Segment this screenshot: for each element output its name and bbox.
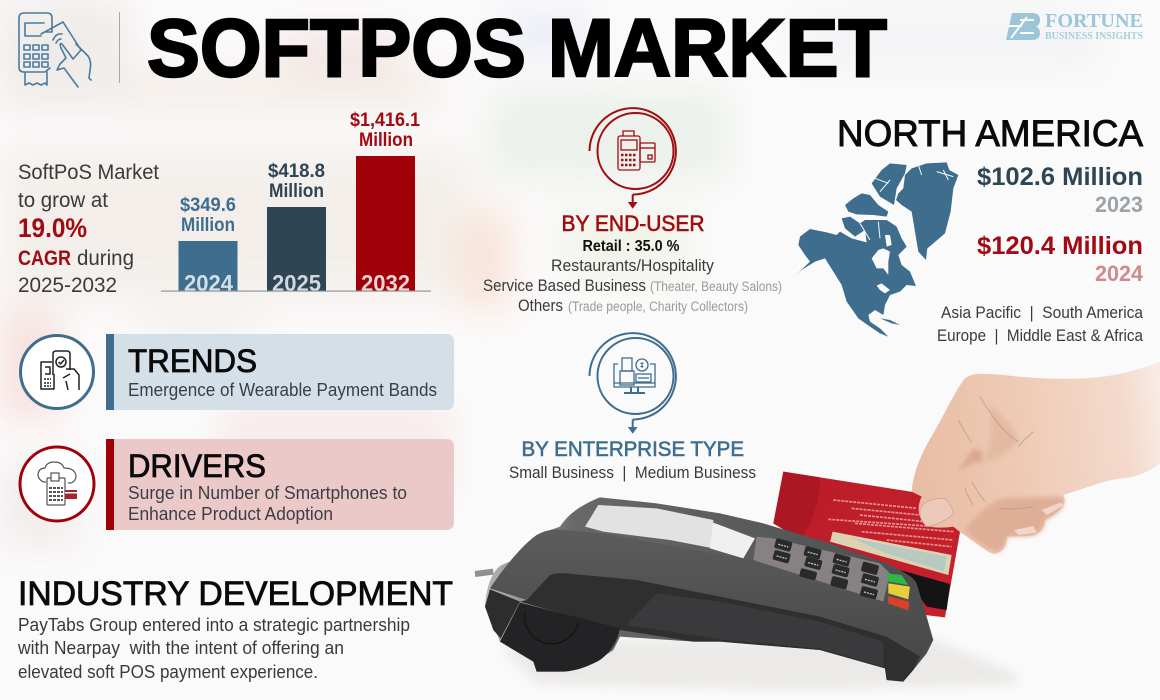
- icon: drivers cloud POS: [20, 447, 94, 521]
- end-user retail share: Retail : 35.0 %: [582, 238, 680, 255]
- panel: trends: [106, 334, 454, 410]
- icon: enterprise ring and arrow: [590, 333, 676, 432]
- bar 2025: $418.8: [268, 161, 325, 182]
- bar 2032: $1,416.1: [350, 110, 420, 131]
- terminal front panel: [490, 529, 933, 657]
- panel: by enterprise type: [509, 333, 756, 482]
- terminal screen: [585, 505, 713, 548]
- icon: trends phone payment: [20, 336, 94, 408]
- bar 2032: [350, 110, 420, 296]
- photo: hand with card at POS terminal: [475, 362, 1160, 690]
- trends accent bar: [106, 334, 114, 410]
- CAGR text block: CAGR: [18, 247, 71, 270]
- terminal lower shell: [520, 573, 920, 682]
- logo: Fortune Business Insights: [1006, 10, 1143, 42]
- trends heading: TRENDS: [128, 343, 257, 379]
- region heading: NORTH AMERICA: [837, 113, 1143, 154]
- floor shadow: [500, 640, 1017, 690]
- header divider: [119, 12, 120, 83]
- industry description: with Nearpay with the intent of offering an: [17, 638, 344, 658]
- CAGR text block: SoftPoS Market: [18, 161, 159, 184]
- icon: card terminal: [618, 131, 655, 170]
- drivers accent bar: [106, 439, 114, 530]
- bar 2024: Million: [181, 215, 235, 236]
- end-user list: Others: [518, 297, 563, 315]
- credit card: [773, 472, 961, 617]
- icon: cash register monitor: [614, 358, 655, 393]
- end-user list: (Trade people, Charity Collectors): [568, 299, 748, 314]
- 2024 value: $120.4 Million: [977, 232, 1143, 260]
- industry description: PayTabs Group entered into a strategic partnership: [18, 615, 410, 635]
- panel: industry development: [17, 575, 453, 682]
- bar 2024: [178, 195, 238, 296]
- POS terminal: [475, 497, 933, 682]
- end-user heading: BY END-USER: [562, 211, 704, 236]
- drivers background: [106, 439, 454, 530]
- logo strapline: BUSINESS INSIGHTS: [1045, 31, 1143, 42]
- panel: drivers: [106, 439, 454, 530]
- drivers heading: DRIVERS: [128, 448, 266, 484]
- enterprise list: Small Business | Medium Business: [509, 464, 756, 482]
- CAGR text block: during: [77, 247, 134, 270]
- other regions: Asia Pacific | South America: [941, 303, 1143, 322]
- icon: end-user ring and arrow: [590, 108, 676, 207]
- other regions: [937, 303, 1143, 345]
- drivers description: Surge in Number of Smartphones to: [128, 482, 407, 503]
- terminal keypad: [753, 537, 890, 602]
- terminal soft keys: [710, 523, 755, 558]
- logo mark: [1006, 13, 1040, 40]
- industry description: [17, 615, 410, 682]
- bar 2032: Million: [359, 130, 413, 151]
- bar 2025: [267, 161, 326, 296]
- printer roll: [500, 603, 620, 672]
- bar 2024: $349.6: [180, 195, 236, 216]
- trends background: [106, 334, 454, 410]
- end-user list: (Theater, Beauty Salons): [650, 279, 782, 294]
- industry description: elevated soft POS payment experience.: [18, 662, 318, 682]
- CAGR text block: to grow at: [18, 189, 108, 212]
- header icon: POS terminal and hand: [19, 13, 91, 87]
- 2023 value: $102.6 Million: [977, 163, 1143, 191]
- bar 2025: Million: [269, 181, 324, 202]
- panel: north america: [797, 113, 1144, 345]
- CAGR text block: [18, 161, 159, 297]
- title: SOFTPOS MARKET: [147, 3, 887, 94]
- terminal buttons: [886, 573, 910, 611]
- end-user list: Restaurants/Hospitality: [551, 257, 715, 275]
- CAGR text block: 2025-2032: [18, 274, 117, 297]
- bar chart: market size: [161, 110, 431, 296]
- terminal body: [485, 497, 933, 682]
- map: north america: [797, 162, 958, 337]
- cable: [475, 572, 493, 574]
- bar 2025: 2025: [272, 270, 321, 296]
- enterprise heading: BY ENTERPRISE TYPE: [522, 437, 744, 461]
- terminal grip: [627, 593, 883, 667]
- hand: [912, 362, 1160, 554]
- panel: by end-user: [483, 108, 782, 315]
- CAGR text block: 19.0%: [18, 213, 87, 243]
- end-user list: [483, 257, 782, 315]
- 2023 label: 2023: [1095, 192, 1143, 217]
- end-user list: Service Based Business: [483, 277, 646, 295]
- trends description: Emergence of Wearable Payment Bands: [128, 379, 437, 400]
- panel: drivers: Enhance Product Adoption: [128, 503, 333, 524]
- logo wordmark: FORTUNE: [1045, 10, 1143, 32]
- bar 2032: 2032: [361, 270, 410, 296]
- industry heading: INDUSTRY DEVELOPMENT: [18, 575, 453, 613]
- bar 2024: 2024: [184, 270, 233, 296]
- 2024 label: 2024: [1095, 261, 1144, 286]
